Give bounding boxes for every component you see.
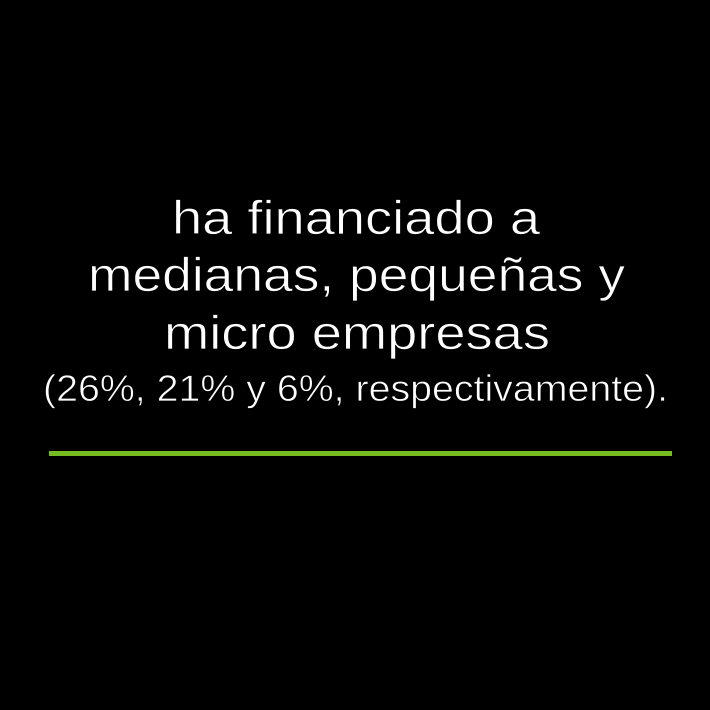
main statement text: micro empresas [164,306,550,359]
green divider line [49,451,672,456]
main statement text: medianas, pequeñas y [88,248,626,301]
main statement text [88,191,626,359]
main statement text: ha financiado a [172,191,541,244]
percentages note: (26%, 21% y 6%, respectivamente). [43,368,668,409]
